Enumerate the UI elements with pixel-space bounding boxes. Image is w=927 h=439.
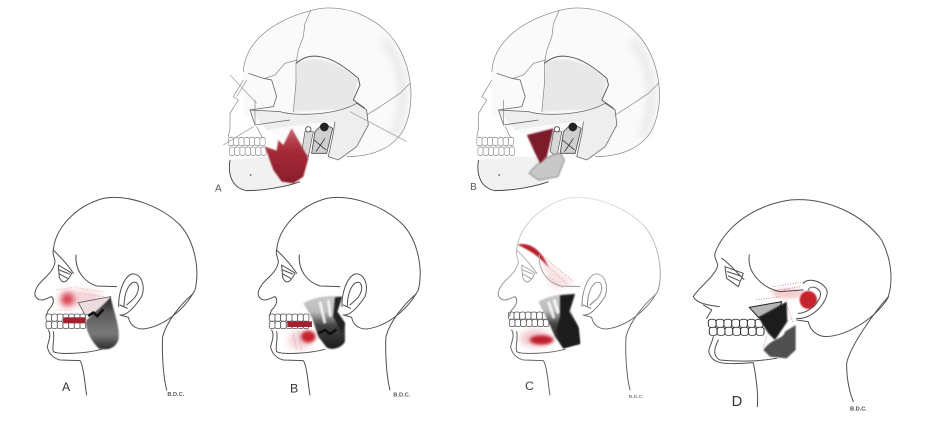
head B masseter muscle [303, 296, 345, 349]
head C signature: B.D.C. [629, 394, 644, 400]
head A red referred pain cloud [57, 287, 103, 310]
head D: trigger point and referred pain [693, 200, 891, 412]
head C masseter muscle [538, 294, 580, 348]
skull B line art [477, 8, 659, 191]
head D ear pain cloud [757, 282, 817, 347]
head D medial muscle [749, 302, 796, 358]
head C label: C [525, 379, 534, 393]
head C teeth [508, 312, 549, 327]
head D outline [693, 200, 891, 407]
head A masseter muscle [78, 297, 119, 349]
skull A: masseter anatomy [215, 8, 411, 195]
skull B label: B [470, 182, 477, 193]
head D label: D [732, 394, 742, 410]
head C brow pain band [517, 244, 575, 288]
skull A guide lines [223, 75, 407, 145]
head A outline [35, 197, 197, 395]
head B outline [258, 197, 420, 395]
skull A masseter muscle in red [265, 128, 308, 183]
head D signature: B.D.C. [850, 406, 867, 412]
skull B jaw lobe [529, 153, 564, 180]
skull B: pterygoid anatomy [470, 8, 659, 193]
head B: trigger point and referred pain [258, 197, 420, 399]
head A teeth [46, 314, 86, 329]
head A label: A [62, 380, 71, 394]
skull B pterygoid muscle in red [527, 128, 553, 163]
head A: trigger point and referred pain [35, 197, 197, 398]
head C: trigger point and referred pain [498, 197, 660, 400]
head A signature: B.D.C. [167, 392, 185, 398]
head B teeth [269, 314, 312, 329]
head D teeth [708, 319, 764, 335]
head B red referred pain cloud [288, 331, 316, 350]
head B signature: B.D.C. [393, 393, 411, 399]
skull A label: A [215, 184, 222, 195]
head C outline [498, 197, 660, 395]
head B label: B [290, 382, 298, 396]
head C jaw pain cloud [520, 330, 554, 347]
skull A line art [228, 8, 411, 191]
